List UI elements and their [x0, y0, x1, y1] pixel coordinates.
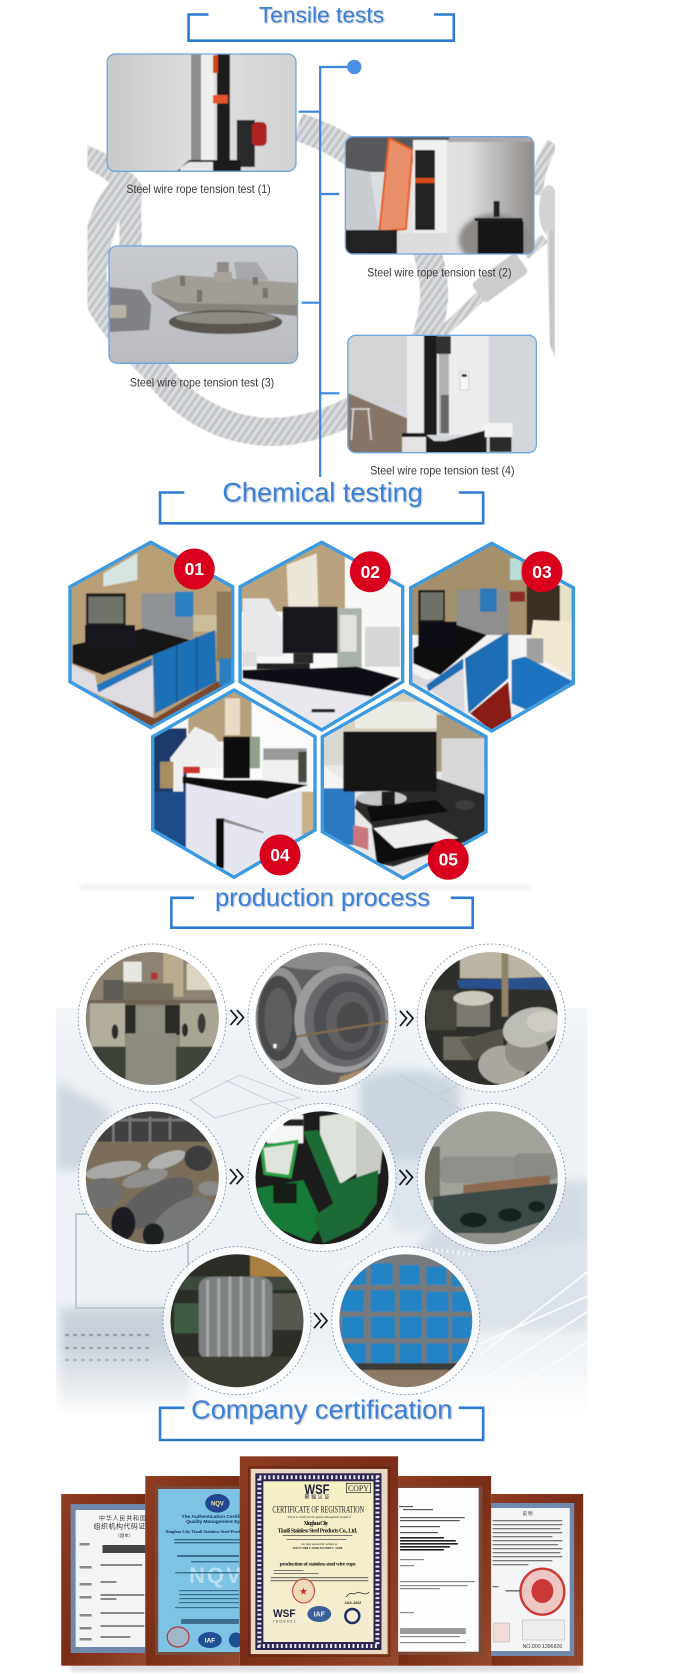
certificate frame: NQV quality management (left): NQV	[189, 1563, 241, 1588]
panel: lab hexagon 02	[237, 538, 407, 735]
heading: Chemical testing: Chemical testing	[222, 478, 423, 508]
badge: 04	[260, 834, 300, 876]
photo: tension test 4	[347, 335, 537, 453]
image: steel wire rope background	[80, 127, 559, 432]
certificate frame: WSF certificate of registration (centre)	[240, 1456, 398, 1666]
badge: 05: 05	[439, 850, 458, 870]
heading: production process	[171, 884, 473, 928]
badge: 02	[350, 551, 391, 592]
step 8: finished blue spools	[332, 1247, 480, 1395]
step 1: melting furnace	[78, 944, 226, 1092]
heading: Tensile tests	[189, 3, 454, 41]
heading: production process: production process	[215, 884, 430, 912]
step 3: drawing machine	[417, 944, 565, 1092]
photo: tension test 2	[345, 136, 534, 266]
badge: 03	[522, 551, 562, 592]
certificate frame: organisation code (far left): 组织机构代码证	[94, 1521, 145, 1531]
certificate frame: registration notes with red seal (far right): NO.000 1396826	[522, 1644, 562, 1650]
caption: tension test 2: Steel wire rope tension test (2)	[367, 266, 512, 279]
icon: rope eye knob	[538, 184, 555, 234]
panel: lab hexagon 01	[67, 538, 237, 732]
panel: lab hexagon 05	[320, 688, 490, 882]
panel: lab hexagon 04	[150, 687, 318, 882]
badge: 05	[428, 839, 469, 880]
certificate frame: NQV quality management (left): Xinghua City Tianli Stainless Steel Prod	[165, 1529, 240, 1534]
certificate frame: WSF certificate of registration (centre): Tianli Stainless Steel Products Co., Ltd.	[278, 1528, 358, 1535]
section: certificates	[61, 1456, 583, 1666]
icon: rope sleeve	[471, 252, 529, 304]
certificate frame: WSF certificate of registration (centre): CERTIFICATE OF REGISTRATION	[272, 1506, 364, 1516]
caption: tension test 4: Steel wire rope tension test (4)	[370, 464, 515, 477]
heading: Company certification	[160, 1396, 483, 1440]
caption: tension test 3: Steel wire rope tension test (3)	[130, 377, 274, 390]
certificate frame: WSF certificate of registration (centre): WSF	[273, 1608, 296, 1620]
certificate frame: NQV quality management (left): NQV	[211, 1501, 224, 1508]
certificate frame: registration notes with red seal (far right): 说 明	[522, 1510, 533, 1517]
certificate frame: NQV quality management (left): The Authentication Certifi	[182, 1514, 241, 1520]
certificate frame: WSF certificate of registration (centre): COPY	[348, 1484, 369, 1493]
certificate frame: NQV quality management (left): IAF	[205, 1637, 215, 1645]
badge: 02: 02	[361, 562, 380, 582]
badge: 01	[174, 548, 215, 590]
badge: 01: 01	[185, 559, 204, 579]
certificate frame: organisation code (far left): 中华人民共和国	[99, 1514, 146, 1523]
certificate frame: WSF certificate of registration (centre): Xinghua City	[304, 1521, 329, 1527]
certificate frame: organisation code (far left): （副本）	[115, 1532, 133, 1539]
photo: tension test 3	[108, 246, 299, 364]
certificate frame: WSF certificate of registration (centre): WSF	[305, 1481, 330, 1497]
certificate frame: WSF certificate of registration (centre): GB/T19001-2008/ISO9001: 2008	[293, 1546, 343, 1550]
certificate frame: NQV quality management (left)	[145, 1476, 243, 1666]
certificate frame: WSF certificate of registration (centre): IAF	[314, 1611, 325, 1619]
certificate frame: NQV quality management (left): Quality Management Sy	[186, 1519, 240, 1525]
photo: tension test 1	[106, 54, 297, 172]
step 6: wire drum machine	[417, 1104, 565, 1252]
certificate frame: WSF certificate of registration (centre): This is to certify that the Quality Management System of	[288, 1516, 351, 1519]
certificate paper	[255, 1473, 381, 1650]
certificate frame: organisation code (far left)	[61, 1494, 146, 1666]
badge: 03: 03	[532, 562, 552, 582]
certificate frame: WSF certificate of registration (centre): production of stainless steel wire rope	[280, 1561, 356, 1568]
certificate frame: WSF certificate of registration (centre): has been assessed & certified as	[301, 1543, 337, 1546]
certificate frame: registration notes with red seal (far right)	[491, 1494, 583, 1666]
certificate frame: signed letter (right)	[398, 1476, 491, 1666]
arrows between steps	[230, 1010, 413, 1328]
timeline connector line	[299, 60, 361, 477]
section: tensile tests	[106, 3, 537, 523]
certificate frame: WSF certificate of registration (centre): 聚福认证	[305, 1493, 329, 1501]
step 2: wire rod coils	[248, 944, 396, 1092]
heading: Company certification: Company certification	[191, 1396, 452, 1424]
heading: Chemical testing	[160, 478, 483, 523]
certificate frame: WSF certificate of registration (centre): JAS-ANZ	[344, 1601, 362, 1605]
certificate frame: WSF certificate of registration (centre): ISO9001	[273, 1619, 296, 1624]
step 4: wire coils in warehouse	[78, 1104, 226, 1253]
badge: 04: 04	[270, 845, 290, 865]
step 7: wire spool	[163, 1247, 311, 1395]
step 5: green stranding machine	[248, 1104, 396, 1252]
icon: rope shaft	[546, 230, 555, 358]
background: industrial collage	[56, 1008, 590, 1418]
caption: tension test 1: Steel wire rope tension test (1)	[126, 183, 271, 196]
panel: lab hexagon 03	[408, 540, 577, 735]
heading: Tensile tests: Tensile tests	[259, 3, 384, 28]
certificate frame: WSF certificate of registration (centre): ★	[300, 1587, 308, 1596]
